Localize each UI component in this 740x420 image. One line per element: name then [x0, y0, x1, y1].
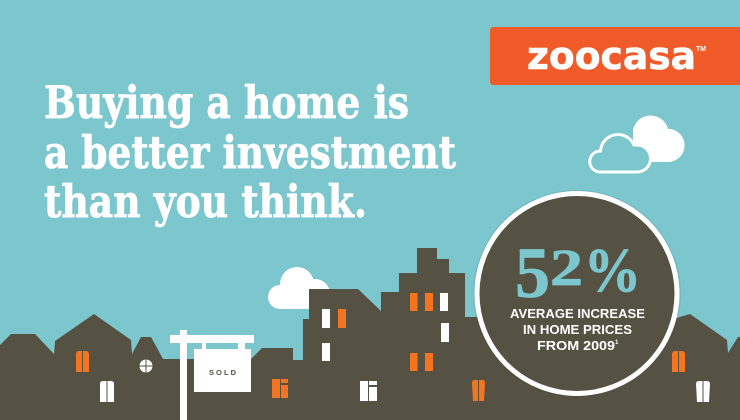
sold sign — [170, 330, 254, 420]
skyline of houses — [0, 248, 740, 420]
window: white split — [360, 381, 377, 401]
windows — [76, 293, 710, 402]
headline: than you think. — [44, 175, 367, 228]
stat caption: 1 — [615, 340, 619, 346]
stat circle — [473, 190, 681, 398]
stat value: 5 — [515, 233, 550, 313]
window: white arched, left house — [100, 381, 114, 402]
logo badge: TM — [696, 46, 706, 53]
icon: clouds top right — [590, 115, 685, 172]
window: orange arched, left house — [76, 351, 89, 372]
stat caption — [510, 306, 645, 353]
headline: a better investment — [44, 126, 456, 179]
headline: Buying a home is — [44, 76, 409, 129]
sign label: SOLD — [209, 368, 237, 377]
stat caption: FROM 2009 — [537, 338, 615, 353]
sign post — [170, 330, 254, 420]
windows: tall building right — [410, 293, 449, 371]
stat caption: IN HOME PRICES — [523, 322, 632, 337]
window: orange arched, right house — [672, 351, 685, 372]
window: orange arched, below circle — [472, 380, 485, 401]
icon: cloud behind buildings — [268, 267, 330, 309]
logo badge — [490, 27, 740, 85]
stat value: 2 — [550, 240, 583, 297]
stat value: % — [584, 237, 641, 305]
window: round white — [139, 359, 153, 373]
windows: tall building left — [322, 309, 346, 361]
logo badge: zoocasa — [527, 34, 696, 78]
window: orange split near sign — [272, 379, 288, 398]
window: white arched, right house — [696, 381, 710, 402]
headline — [44, 76, 456, 228]
stat caption: AVERAGE INCREASE — [510, 306, 645, 321]
